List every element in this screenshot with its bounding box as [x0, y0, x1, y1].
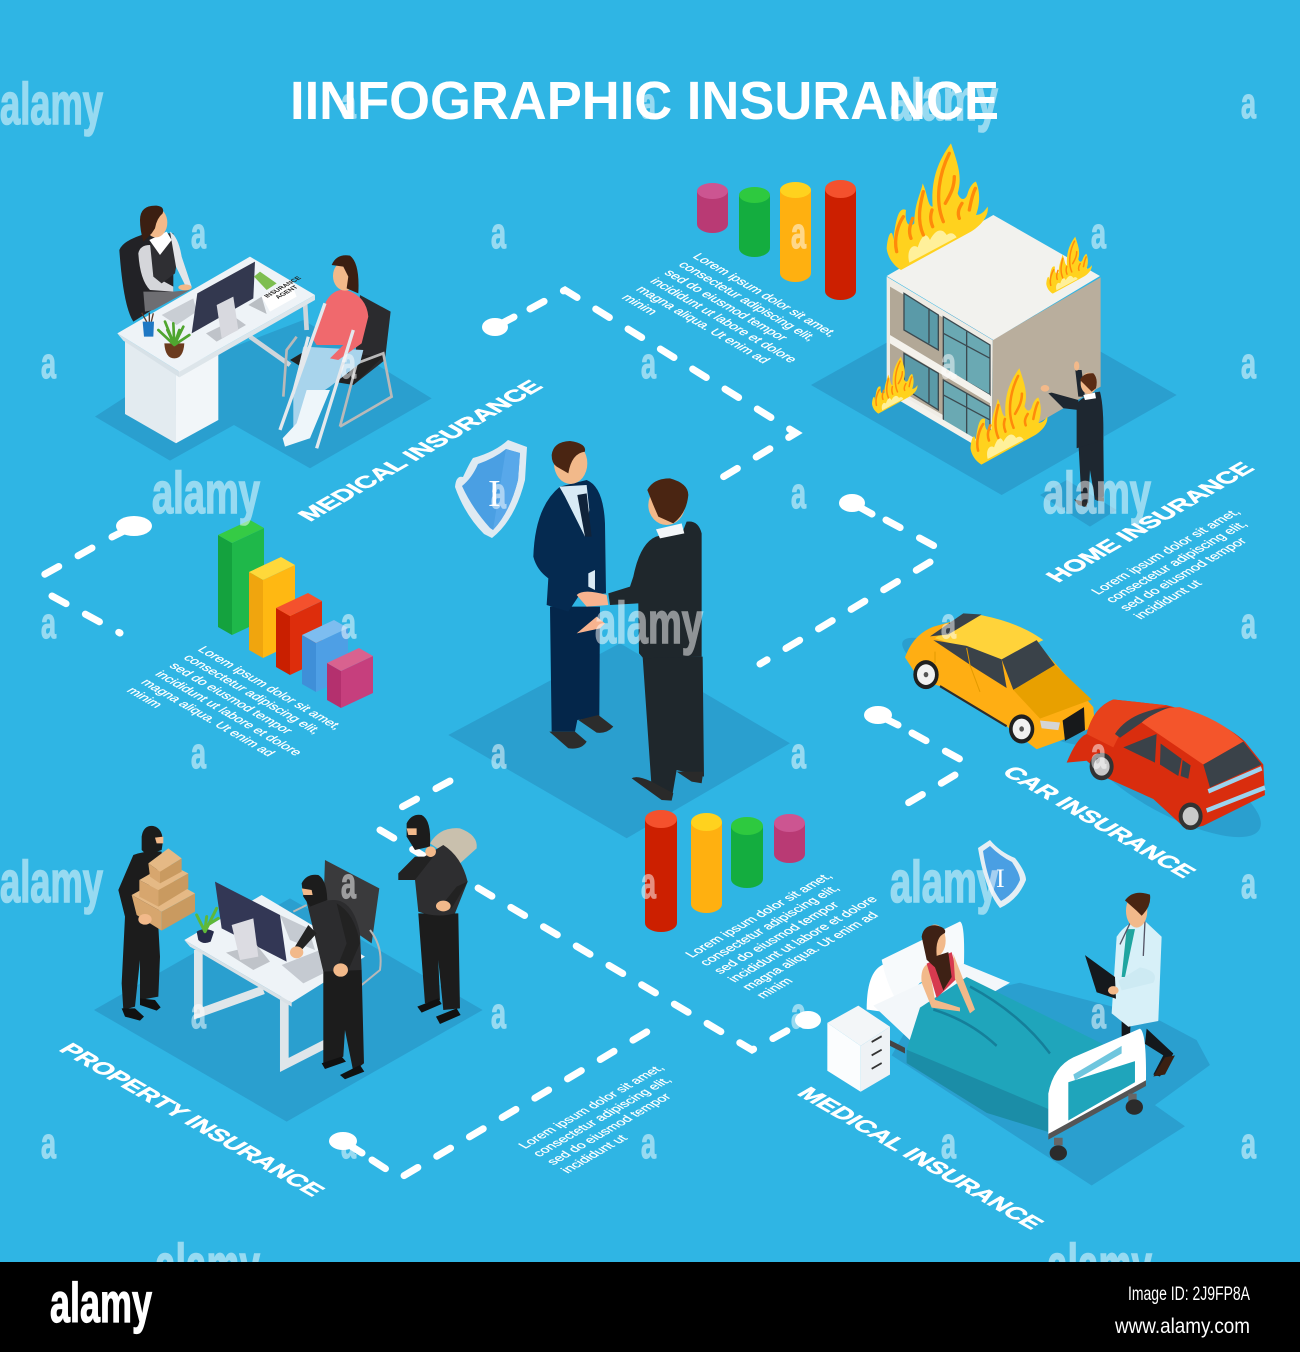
label: medical insurance (agent): MEDICAL INSURANCE	[292, 376, 548, 525]
stock watermarks: a	[191, 729, 206, 778]
stock watermarks: a	[1091, 729, 1106, 778]
stock watermarks: a	[341, 339, 356, 388]
stock watermarks: a	[491, 729, 506, 778]
text block: center bottom: magna aliqua. Ut enim ad	[738, 910, 882, 992]
text block: top: sed do eiusmod tempor	[661, 267, 792, 343]
stock watermarks: alamy	[0, 850, 103, 915]
shield letter: I	[488, 473, 501, 515]
shield icon: small	[978, 840, 1026, 908]
text block: center bottom: incididunt ut labore et dolore	[724, 894, 881, 984]
stock watermarks: a	[341, 859, 356, 908]
text block: top: Lorem ipsum dolor sit amet,	[689, 251, 841, 339]
text block: home: incididunt ut	[1130, 578, 1205, 621]
shield icon: large	[455, 440, 527, 538]
text block: top: magna aliqua. Ut enim ad	[633, 284, 774, 365]
stock watermarks: a	[1241, 1119, 1256, 1168]
stock watermarks: alamy	[1047, 1233, 1152, 1298]
stock watermarks: alamy	[890, 850, 998, 915]
text block: home: Lorem ipsum dolor sit amet,	[1088, 506, 1244, 597]
label: home insurance: HOME INSURANCE	[1040, 458, 1260, 586]
stock watermarks: alamy	[152, 461, 260, 526]
text block: left: magna aliqua. Ut enim ad	[138, 677, 279, 758]
text block: left: consectetur adipiscing elit,	[180, 652, 325, 736]
stock watermarks: a	[341, 599, 356, 648]
scene: house on fire	[811, 143, 1177, 527]
stock watermarks: alamy	[155, 1233, 260, 1298]
flow connector: left	[38, 516, 152, 633]
text block: left: minim	[123, 685, 166, 710]
text block: top: incididunt ut labore et dolore	[647, 276, 801, 365]
flow connector: car	[864, 706, 967, 812]
text block: top: minim	[618, 292, 661, 317]
text block: home: consectetur adipiscing elit,	[1102, 519, 1251, 605]
stock watermarks: a	[791, 989, 806, 1038]
top cylinder chart	[697, 180, 856, 300]
stock watermarks: a	[941, 339, 956, 388]
text block: top	[618, 251, 844, 381]
text block: left: sed do eiusmod tempor	[166, 660, 297, 736]
stock watermarks: a	[1241, 859, 1256, 908]
desk sign: AGENT	[274, 285, 300, 300]
scene: handshake of businessmen	[448, 441, 790, 838]
stock watermarks: a	[1241, 339, 1256, 388]
stock watermarks: a	[191, 209, 206, 258]
stock watermarks: a	[1091, 209, 1106, 258]
stock watermarks: alamy	[0, 72, 103, 137]
center cylinder chart	[645, 810, 805, 932]
text block: center bottom: consectetur adipiscing elit,	[696, 883, 843, 968]
stock watermarks: a	[941, 599, 956, 648]
text block: home: sed do eiusmod tempor	[1116, 535, 1251, 613]
stock watermarks: a	[491, 209, 506, 258]
text block: left	[123, 644, 349, 774]
text block: center bottom: sed do eiusmod tempor	[710, 899, 843, 976]
text block: top: consectetur adipiscing elit,	[675, 259, 820, 343]
stock watermarks: a	[491, 989, 506, 1038]
flow connector: top	[482, 290, 796, 480]
stock watermarks: a	[641, 339, 656, 388]
desk sign: INSURANCE	[263, 276, 303, 299]
text block: center bottom	[682, 869, 909, 1001]
label: property insurance: PROPERTY INSURANCE	[54, 1039, 331, 1200]
text block: property: incididunt ut	[557, 1133, 631, 1175]
scene: insurance agent and patient	[95, 206, 432, 468]
footer image id: Image ID: 2J9FP8A	[1128, 1284, 1250, 1305]
title: IINFOGRAPHIC INSURANCE	[290, 71, 999, 131]
text block: property	[515, 1062, 710, 1175]
label: car insurance: CAR INSURANCE	[997, 762, 1202, 881]
footer logo: alamy	[50, 1271, 152, 1334]
text block: property: Lorem ipsum dolor sit amet,	[515, 1062, 667, 1151]
stock watermarks: a	[641, 859, 656, 908]
text block: left: incididunt ut labore et dolore	[152, 669, 306, 758]
stock watermarks: alamy	[595, 591, 703, 656]
stock watermarks: a	[791, 729, 806, 778]
stock watermarks: a	[341, 1119, 356, 1168]
text block: home	[1088, 506, 1286, 621]
text block: property: sed do eiusmod tempor	[543, 1091, 675, 1167]
stock watermarks: a	[641, 1119, 656, 1168]
stock watermarks: a	[791, 469, 806, 518]
stock watermarks: a	[41, 339, 56, 388]
stock watermarks: a	[41, 599, 56, 648]
stock watermarks: a	[1241, 599, 1256, 648]
text block: property: consectetur adipiscing elit,	[529, 1075, 675, 1159]
stock watermarks: a	[1241, 79, 1256, 128]
stock watermarks: a	[41, 1119, 56, 1168]
stock watermarks: a	[641, 79, 656, 128]
scene: hospital bed with doctor	[827, 893, 1210, 1186]
stock watermarks: a	[491, 469, 506, 518]
scene: thieves robbing an office	[94, 815, 483, 1122]
stock watermarks: alamy	[890, 68, 998, 133]
stock watermarks: a	[1091, 989, 1106, 1038]
scene: car accident	[894, 613, 1272, 858]
flow connector: center to medical	[380, 781, 821, 1050]
stock watermarks: alamy	[1043, 461, 1151, 526]
text block: center bottom: Lorem ipsum dolor sit amet,	[682, 871, 836, 960]
stock watermarks: a	[791, 209, 806, 258]
small shield letter: I	[996, 864, 1005, 893]
footer bar	[0, 1262, 1300, 1352]
cuboid bar chart	[218, 520, 373, 708]
label: medical insurance (hospital): MEDICAL INSURANCE	[792, 1083, 1050, 1233]
stock watermarks: a	[341, 79, 356, 128]
text block: center bottom: minim	[753, 975, 796, 1001]
stock watermarks: a	[191, 989, 206, 1038]
flow connector: home	[760, 494, 940, 664]
footer website: www.alamy.com	[1114, 1315, 1250, 1338]
stock watermarks: a	[941, 1119, 956, 1168]
text block: left: Lorem ipsum dolor sit amet,	[194, 644, 346, 732]
flow connector: property	[329, 1030, 650, 1178]
